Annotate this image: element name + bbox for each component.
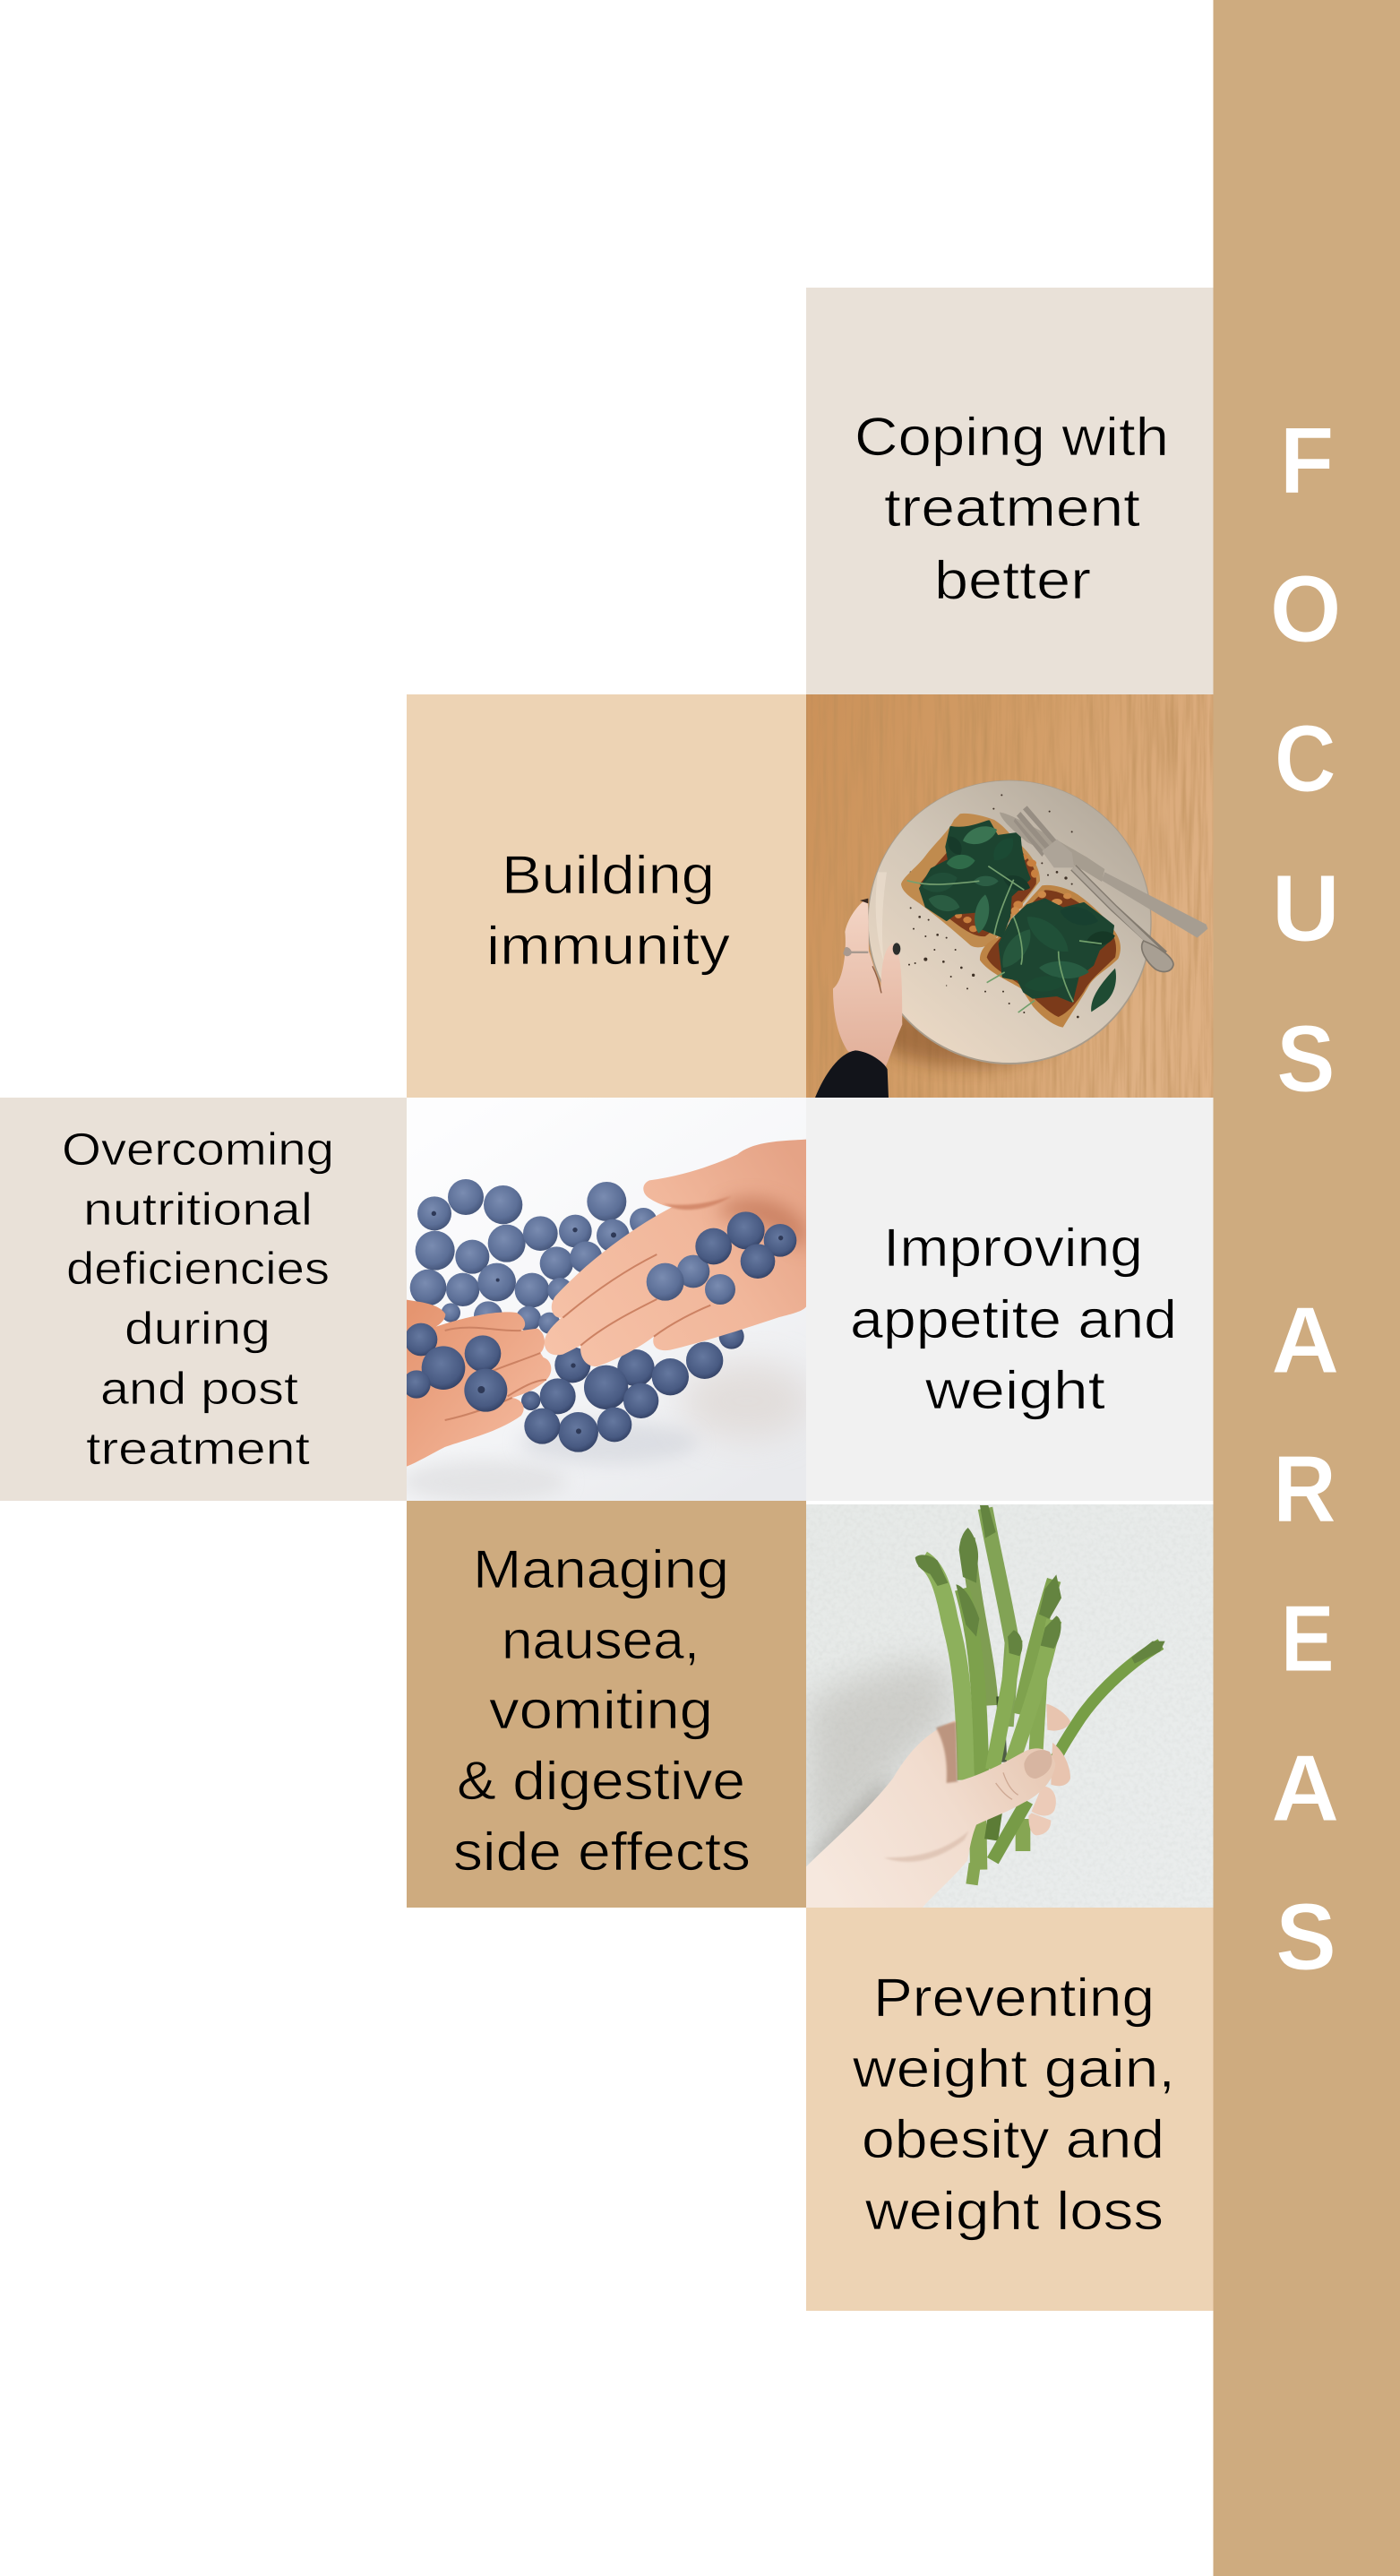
text: overcoming nutritional deficiencies during and post treatment: Overcoming (62, 1124, 334, 1175)
panel: preventing weight gain, obesity and weight loss (806, 1908, 1213, 2311)
text: preventing weight gain, obesity and weight loss: Preventing (873, 1968, 1155, 2028)
text: preventing weight gain, obesity and weight loss: weight gain, (852, 2038, 1175, 2098)
hand holding plate (815, 899, 902, 1098)
text: preventing weight gain, obesity and weight loss: weight loss (864, 2181, 1164, 2241)
text: managing nausea, vomiting and digestive side effects: nausea, (502, 1610, 700, 1670)
text: managing nausea, vomiting and digestive side effects: vomiting (489, 1680, 713, 1740)
title: FOCUS AREAS: C (1275, 706, 1336, 812)
panel: improving appetite and weight (806, 1098, 1213, 1501)
photo: hands holding blueberries (407, 1128, 806, 1501)
title: FOCUS AREAS: F (1280, 408, 1334, 513)
panel: overcoming nutritional deficiencies (0, 1098, 407, 1501)
text: building immunity (486, 845, 730, 976)
text: building immunity: Building (502, 845, 715, 905)
text: improving appetite and weight: Improving (883, 1218, 1143, 1278)
panel: building immunity (407, 694, 806, 1098)
text: building immunity: immunity (486, 916, 730, 976)
photo: hand holding asparagus (806, 1504, 1213, 1908)
text: coping with treatment better: Coping with (855, 407, 1169, 467)
text: overcoming nutritional deficiencies during and post treatment: nutritional (83, 1184, 313, 1235)
panel: coping with treatment better (806, 288, 1213, 694)
text: overcoming nutritional deficiencies during and post treatment: treatment (86, 1423, 310, 1474)
title: FOCUS AREAS: U (1272, 856, 1340, 961)
text: overcoming nutritional deficiencies during and post treatment: during (125, 1303, 271, 1354)
text: managing nausea, vomiting and digestive side effects: side effects (453, 1822, 751, 1882)
spinach on second toast (987, 900, 1116, 1012)
text: managing nausea, vomiting and digestive side effects: Managing (473, 1539, 729, 1599)
text: overcoming nutritional deficiencies during and post treatment (62, 1124, 334, 1474)
title: FOCUS AREAS: A (1271, 1736, 1340, 1841)
text: improving appetite and weight: weight (924, 1360, 1105, 1420)
title: FOCUS AREAS (1270, 408, 1342, 1990)
text: improving appetite and weight: appetite and (850, 1289, 1177, 1349)
text: coping with treatment better: better (934, 550, 1091, 610)
text: managing nausea, vomiting and digestive side effects: & digestive (457, 1751, 745, 1811)
text: coping with treatment better: treatment (884, 478, 1140, 538)
spinach on first toast (907, 822, 1033, 936)
text: coping with treatment better (855, 407, 1169, 610)
text: improving appetite and weight (850, 1218, 1177, 1420)
title: FOCUS AREAS: E (1281, 1586, 1335, 1692)
panel: focus areas vertical bar (1213, 0, 1400, 2576)
title: FOCUS AREAS: O (1270, 556, 1342, 662)
text: preventing weight gain, obesity and weight loss: obesity and (862, 2109, 1164, 2169)
text: overcoming nutritional deficiencies during and post treatment: and post (100, 1363, 298, 1414)
title: FOCUS AREAS: R (1273, 1436, 1336, 1542)
text: preventing weight gain, obesity and weight loss (852, 1968, 1175, 2241)
photo: toast with spinach on a plate (806, 694, 1213, 1098)
text: managing nausea, vomiting and digestive side effects (453, 1539, 751, 1882)
title: FOCUS AREAS: S (1275, 1884, 1336, 1990)
cutlery: knife and fork (1000, 806, 1207, 971)
panel: managing nausea, vomiting and digestive side effects (407, 1501, 806, 1908)
text: overcoming nutritional deficiencies during and post treatment: deficiencies (66, 1243, 330, 1294)
title: FOCUS AREAS: S (1276, 1006, 1336, 1112)
title: FOCUS AREAS: A (1271, 1288, 1340, 1393)
